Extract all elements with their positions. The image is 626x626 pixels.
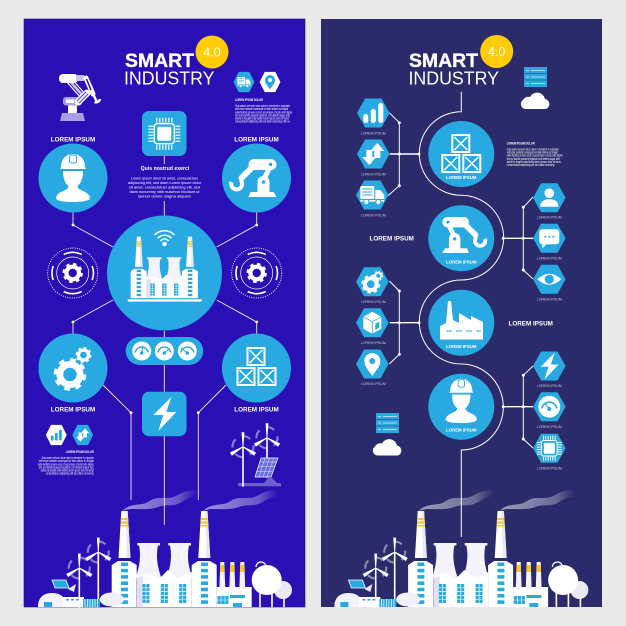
text block: dark note: consectetuer adipiscing elit sed diam nonummy <box>507 163 555 167</box>
text block: top right note: dolore te feugait nulla facilisi lorem ipsum dolor sit amet <box>235 116 289 120</box>
text block: top right note: sim qui blandit praesent luptatum zzril delenit augue duis <box>235 113 290 117</box>
icon: server and cloud bottom <box>373 413 401 456</box>
icon: right gear target <box>232 248 282 298</box>
icon: arrows hexagon <box>72 425 93 445</box>
title: smart industry dark: SMART <box>409 50 478 72</box>
hex column: left <box>356 98 390 386</box>
hex column: right: LOREM IPSUM <box>537 214 562 220</box>
circle: robot: LOREM IPSUM <box>446 260 477 264</box>
title: smart industry dark: 4.0 <box>488 45 505 59</box>
icon: chart hexagon <box>46 425 67 445</box>
circle: factory: LOREM IPSUM <box>446 344 477 349</box>
icon: robot arm <box>59 74 100 121</box>
text block: lower left note: LOREM IPSUM DOLOR <box>66 450 94 454</box>
text block: lower left note: sim qui blandit praesent luptatum zzril delenit augue duis <box>39 465 94 469</box>
icon: left gear target <box>48 248 98 298</box>
title: smart industry: SMART <box>125 50 194 72</box>
icon: delivery truck hexagon <box>234 72 254 92</box>
text block: dark note: LOREM IPSUM DOLOR <box>507 142 535 146</box>
hex column: left: LOREM IPSUM <box>361 212 386 218</box>
text block: dark note <box>507 142 563 167</box>
circle: central smart factory <box>107 216 222 330</box>
text block: top right note: consectetuer adipiscing elit sed diam nonummy nibh eu <box>235 120 290 124</box>
text block: quis nostrud: Lorem ipsum dolor sit amet, consectetuer <box>131 176 199 180</box>
text block: top right note <box>235 98 292 124</box>
text block: top right note: nulla facilisis at vero eros et accumsan et iusto odio dignis <box>235 110 292 114</box>
text block: lower left note: velit esse molestie consequat vel illum dolore eu feugiat <box>39 459 94 463</box>
hex column: left: LOREM IPSUM <box>361 381 386 386</box>
circle: robot <box>428 205 494 271</box>
factory skyline <box>38 490 292 608</box>
text block: quis nostrud: adipiscing elit, sed diam Lorem ipsum dolor <box>128 180 202 185</box>
gauges pill <box>126 337 203 365</box>
icon: wind turbines and solar panel <box>230 424 281 487</box>
circle: gears: LOREM IPSUM <box>51 406 95 414</box>
label: side heading one: LOREM IPSUM <box>369 236 414 242</box>
circle: robot <box>222 136 291 212</box>
hex column: left: LOREM IPSUM <box>361 299 386 304</box>
text block: lower left note <box>38 450 94 476</box>
text block: dark note: dolore te feugait nulla facilisi lorem ipsum dolor sit amet <box>507 160 561 164</box>
text block: dark note: velit esse molestie consequat vel illum dolore eu feugiat <box>507 150 558 154</box>
text block: lower left note: Duis autem vel eum iriure dolor in hendrerit in vulputate <box>42 456 94 460</box>
text block: top right note: velit esse molestie consequat vel illum dolore eu feugiat <box>235 107 288 111</box>
text block: lower left note: nulla facilisis at vero eros et accumsan et iusto odio dignis <box>38 462 94 466</box>
circle: factory <box>428 290 494 356</box>
hex column: left: LOREM IPSUM <box>361 172 386 176</box>
circle: crates <box>428 121 494 187</box>
factory skyline dark <box>334 490 588 608</box>
text block: quis nostrud: sit amet, consectetuer adipiscing elit, sed <box>129 184 200 190</box>
text block: top right note: Duis autem vel eum iriure dolor in hendrerit in vulputate <box>235 104 290 108</box>
circle: gears <box>38 334 108 414</box>
icon: energy bolt tile <box>142 392 186 436</box>
label: side heading two: LOREM IPSUM <box>508 320 553 328</box>
text block: quis nostrud <box>128 166 202 198</box>
panel: navy infographic <box>321 19 602 608</box>
title: smart industry <box>124 36 228 88</box>
hex column: right: LOREM IPSUM <box>537 424 562 429</box>
circle: worker <box>38 136 108 212</box>
text block: dark note: Duis autem vel eum iriure dolor in hendrerit in vulputate <box>507 148 559 152</box>
icon: location hexagon <box>260 72 280 92</box>
text block: quis nostrud: laoreet dolore magna aliquam <box>138 194 192 198</box>
text block: dark note: sim qui blandit praesent luptatum zzril delenit augue duis <box>507 157 560 161</box>
hex column: left: LOREM IPSUM <box>361 130 386 136</box>
circle: worker <box>428 374 494 440</box>
hex column: right: LOREM IPSUM <box>537 296 562 302</box>
text block: lower left note: dolore te feugait nulla facilisi lorem ipsum dolor sit amet <box>41 468 94 472</box>
circle: worker: LOREM IPSUM <box>51 136 95 144</box>
hex column: right: LOREM IPSUM <box>537 256 562 260</box>
title: smart industry: INDUSTRY <box>124 68 215 88</box>
circle: crates: LOREM IPSUM <box>234 406 279 414</box>
hex column: right: LOREM IPSUM <box>537 466 562 470</box>
hex column: left: LOREM IPSUM <box>361 340 386 345</box>
text block: dark note: nulla facilisis at vero eros et accumsan et iusto odio dignis <box>507 154 563 158</box>
circle: crates: LOREM IPSUM <box>446 175 477 180</box>
icon: microchip tile <box>142 111 186 156</box>
text block: quis nostrud: diam nonummy nibh euismod tincidunt ut <box>130 189 200 194</box>
circle: robot: LOREM IPSUM <box>234 136 279 144</box>
connector lines <box>72 156 258 525</box>
circle: worker: LOREM IPSUM <box>446 428 477 432</box>
panel: blue infographic <box>24 19 305 608</box>
hex column: right: LOREM IPSUM <box>537 383 562 388</box>
S-curve connector <box>388 92 533 537</box>
icon: server and cloud top <box>521 67 549 109</box>
title: smart industry dark <box>408 35 513 88</box>
title: smart industry dark: INDUSTRY <box>408 68 499 88</box>
text block: top right note: LOREM IPSUM DOLOR <box>235 98 263 102</box>
circle: crates <box>222 334 291 414</box>
text block: quis nostrud: Quis nostrud exerci <box>141 166 190 172</box>
hex column: right <box>533 183 566 470</box>
title: smart industry: 4.0 <box>203 46 221 60</box>
text block: lower left note: consectetuer adipiscing elit sed diam nonummy <box>46 472 94 476</box>
